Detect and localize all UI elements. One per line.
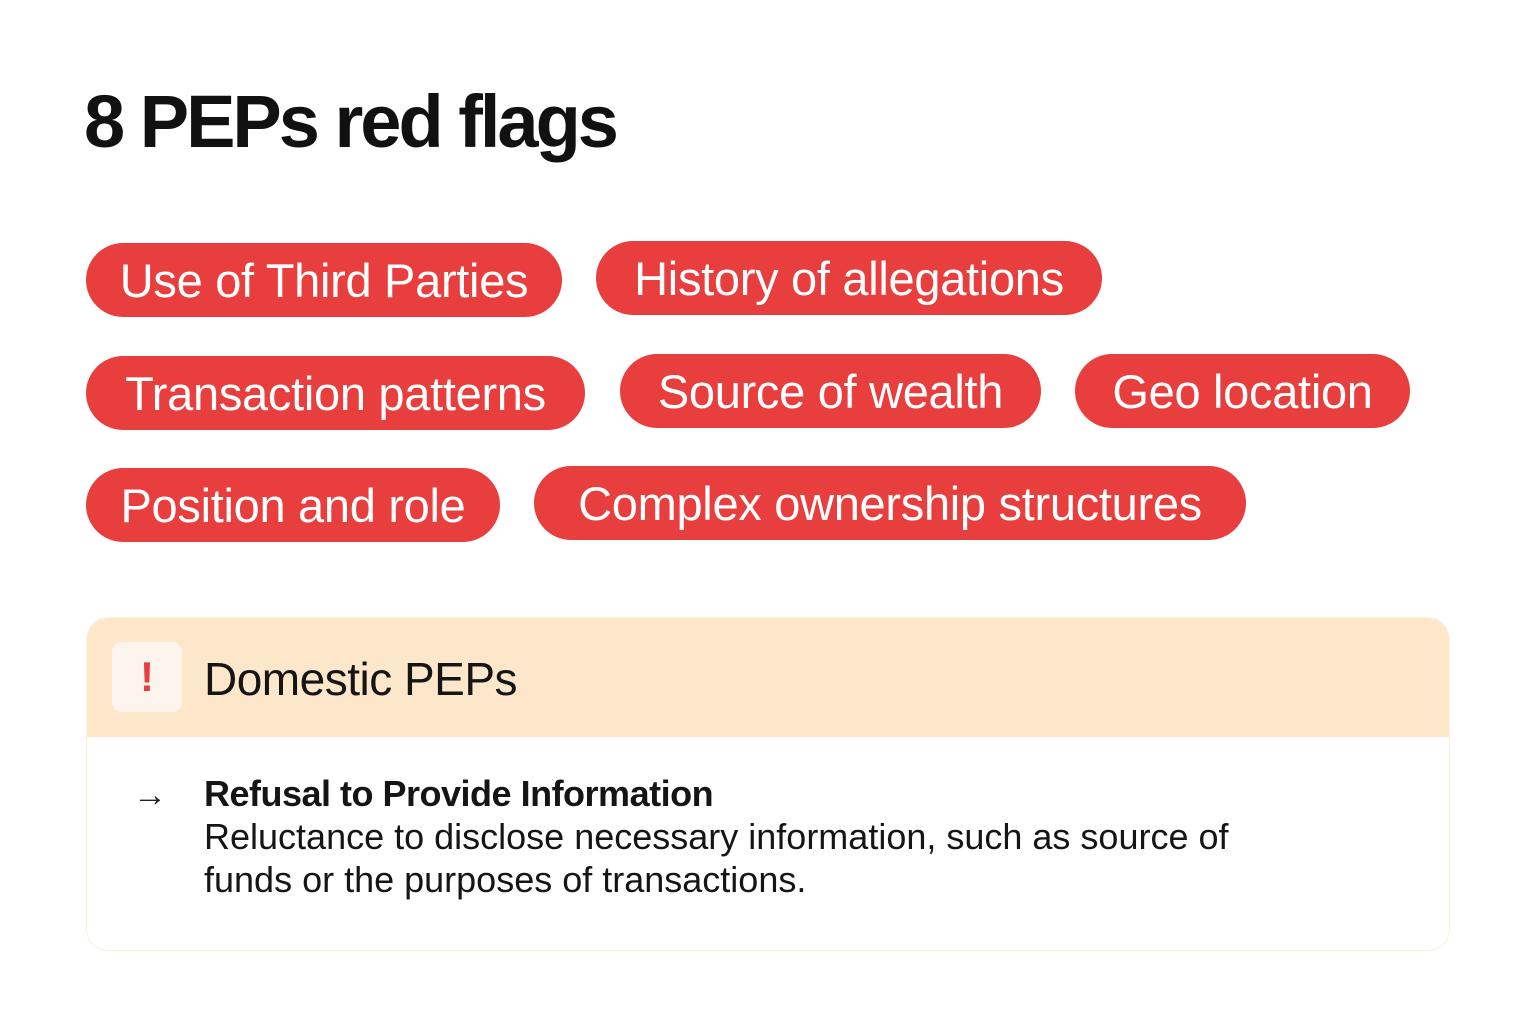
title: 8 PEPs red flags xyxy=(84,80,616,163)
pill: Transaction patterns xyxy=(86,356,585,430)
text block: refusal xyxy=(204,773,1229,900)
icon: arrow: → xyxy=(133,776,167,814)
pill: Complex ownership structures: Complex ownership structures xyxy=(578,477,1202,530)
pill: Transaction patterns: Transaction patterns xyxy=(125,367,546,420)
pill: Source of wealth: Source of wealth xyxy=(658,365,1003,418)
icon: exclamation: ! xyxy=(140,653,154,700)
pill: Use of Third Parties xyxy=(86,243,562,317)
pill: History of allegations: History of allegations xyxy=(634,252,1064,305)
text block: refusal: Reluctance to disclose necessary information, such as source of xyxy=(204,816,1229,857)
pill: Geo location: Geo location xyxy=(1112,365,1373,418)
text block: refusal: funds or the purposes of transactions. xyxy=(204,859,806,900)
pill: Geo location xyxy=(1075,354,1410,428)
text block: refusal: Refusal to Provide Information xyxy=(204,773,713,814)
pill: Position and role: Position and role xyxy=(120,479,466,532)
panel: Domestic PEPs xyxy=(86,617,1450,951)
heading: Domestic PEPs xyxy=(204,653,517,705)
panel header xyxy=(87,618,1449,737)
pill: History of allegations xyxy=(596,241,1102,315)
pill: Source of wealth xyxy=(620,354,1041,428)
icon: exclamation xyxy=(112,642,182,712)
pill: Complex ownership structures xyxy=(534,466,1246,540)
pill: Position and role xyxy=(86,468,500,542)
pill: Use of Third Parties: Use of Third Parties xyxy=(120,254,528,307)
